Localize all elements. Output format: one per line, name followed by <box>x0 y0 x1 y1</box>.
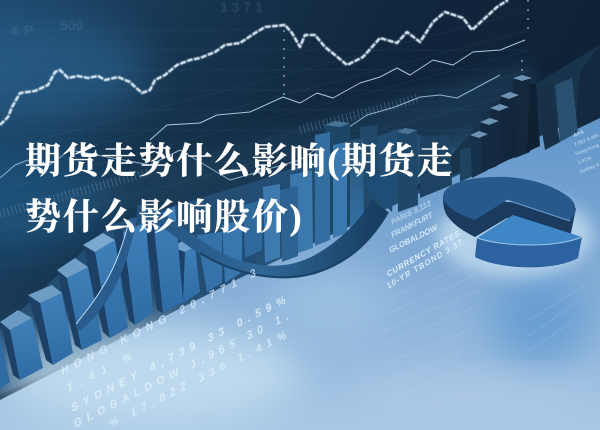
ticker: top right table: Hong Kong <box>575 142 600 157</box>
blurred digits on the top strip <box>11 2 262 35</box>
ticker: hong kong table: HONG KONG 20,771 3 <box>61 267 257 378</box>
ticker: global dow: GLOBALDOW 1,965 30 1. <box>74 310 289 430</box>
blurred digits on the top strip: & P <box>10 22 33 38</box>
detached slice top <box>477 215 582 245</box>
price line: thin lower <box>0 75 500 180</box>
ticker: sydney: SYDNEY 4,739 33 0.59% <box>71 294 286 415</box>
arrow head <box>362 175 392 212</box>
faded data columns <box>380 265 585 425</box>
price line: thin middle <box>150 40 525 140</box>
ticker: percent: 1.41 % <box>67 350 133 395</box>
bar 4 <box>83 233 128 338</box>
bar 2 <box>28 285 73 365</box>
light blue lower area <box>0 108 600 430</box>
far staircase bars, right <box>420 45 600 198</box>
pie notch wall highlight <box>507 200 570 221</box>
pie chart <box>437 177 593 277</box>
ticker: top right table: 7,052 8 495 <box>573 133 600 148</box>
price line: bright candles <box>0 0 508 125</box>
volume ticks <box>0 98 420 214</box>
main curved band <box>137 200 388 277</box>
thin ribbon <box>75 218 137 331</box>
ticker: top right table: 1.41% <box>577 155 593 166</box>
ticker: bottom row: % 17,022 336 1.41% <box>109 329 287 430</box>
ticker: top right table: AAA <box>573 129 585 139</box>
bar 3 <box>57 258 102 350</box>
bar 0 <box>0 335 10 389</box>
bar 5 <box>113 222 153 325</box>
title line 1: 期货走势什么影响(期货走 <box>25 141 455 181</box>
stock line charts <box>0 0 528 214</box>
bar 1 <box>0 310 43 380</box>
bar 7 <box>178 242 200 303</box>
pie glow <box>437 193 593 277</box>
rising arrow <box>75 166 396 331</box>
ticker: top right table <box>565 124 600 175</box>
pie side <box>443 196 576 238</box>
middle bars <box>197 121 418 292</box>
pie top <box>443 177 575 221</box>
detached slice side <box>475 237 582 267</box>
blurred digits on the top strip: 500 <box>60 17 84 33</box>
ticker: frankfurt: FRANKFURT <box>390 210 433 240</box>
bar 6 <box>143 206 183 313</box>
rotated ticker text <box>61 124 600 430</box>
front bars, left <box>0 206 200 389</box>
title <box>25 141 455 237</box>
title line 2: 势什么影响股价) <box>25 197 303 237</box>
chart grid lines <box>0 10 530 230</box>
dotted vertical scale <box>284 0 528 100</box>
ticker: currency rates: CURRENCY RATES <box>386 228 461 279</box>
bar backing: right dark block <box>418 45 600 190</box>
stair tops <box>470 75 532 138</box>
ticker: european markets: PARIS 3,112 <box>390 198 432 227</box>
ticker: global: GLOBALDOW <box>389 223 438 255</box>
ticker: bond: 10-YR TBOND 3.37 <box>386 237 464 291</box>
